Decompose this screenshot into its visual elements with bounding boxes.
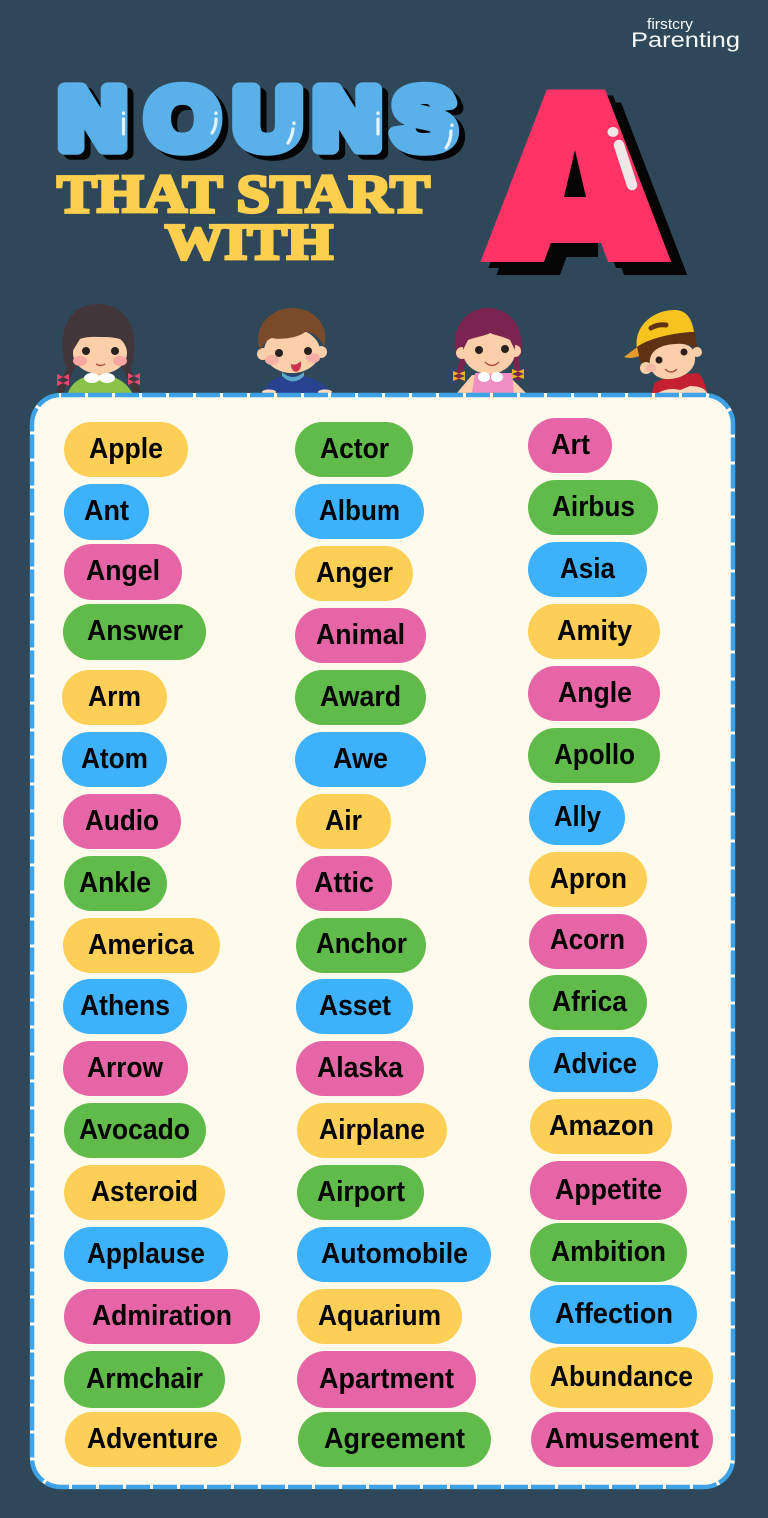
pill: Automobile <box>297 1227 491 1282</box>
character: girl with green dress <box>57 304 140 393</box>
pill: Asia <box>528 542 647 597</box>
pill: Anger: Anger <box>316 557 393 589</box>
pill: Avocado: Avocado <box>79 1114 190 1146</box>
pill: Avocado <box>64 1103 206 1158</box>
pill: Admiration: Admiration <box>92 1300 232 1332</box>
pill: Agreement: Agreement <box>324 1423 465 1455</box>
pill: Athens: Athens <box>80 990 170 1022</box>
pill: Abundance <box>530 1347 713 1408</box>
pill: Angel <box>64 544 182 600</box>
pill: Ambition <box>530 1223 687 1282</box>
pill: Appetite: Appetite <box>555 1174 662 1206</box>
pill: Ankle: Ankle <box>79 867 151 899</box>
column 1: Apple to Adventure <box>62 422 260 1467</box>
pill: Art <box>528 418 612 473</box>
pill: Art: Art <box>551 429 590 461</box>
pill: Arrow <box>63 1041 188 1096</box>
pill: Awe: Awe <box>333 743 388 775</box>
pill: Abundance: Abundance <box>550 1361 693 1393</box>
pill: Advice: Advice <box>553 1048 637 1080</box>
pill: Audio: Audio <box>85 805 159 837</box>
pill: Album <box>295 484 424 539</box>
pill: Apollo: Apollo <box>554 739 635 771</box>
pill: Africa: Africa <box>552 986 628 1018</box>
pill: Ally: Ally <box>554 801 601 833</box>
pill: Angle <box>528 666 660 721</box>
pill: Actor <box>295 422 413 477</box>
logo: FirstCry Parenting <box>631 16 740 52</box>
column 2: Actor to Agreement <box>295 422 491 1467</box>
pill: Airport: Airport <box>317 1176 405 1208</box>
pill: Asia: Asia <box>560 553 616 585</box>
pill: Applause: Applause <box>87 1238 205 1270</box>
pill: Adventure: Adventure <box>87 1423 218 1455</box>
pill: Album: Album <box>319 495 400 527</box>
title: THAT START: THAT START <box>57 164 430 224</box>
title: NOUNS: NOUNS <box>59 71 455 166</box>
pill: Alaska <box>296 1041 424 1096</box>
pill: Atom <box>62 732 167 787</box>
character: boy with blue shirt <box>257 308 332 394</box>
pill: Angle: Angle <box>558 677 632 709</box>
pill: Apple: Apple <box>89 433 163 465</box>
pill: Agreement <box>298 1412 491 1467</box>
big letter A: A <box>504 64 664 299</box>
pill: Apron <box>529 852 647 907</box>
pill: Automobile: Automobile <box>321 1238 468 1270</box>
pill: Angel: Angel <box>86 555 160 587</box>
pill: Anchor: Anchor <box>316 928 407 960</box>
pill: Air: Air <box>325 805 362 837</box>
pill: Alaska: Alaska <box>317 1052 404 1084</box>
pill: Airbus: Airbus <box>552 491 635 523</box>
pill: Ant: Ant <box>84 495 129 527</box>
pill: Aquarium: Aquarium <box>318 1300 441 1332</box>
pill: Adventure <box>65 1412 241 1467</box>
pill: Arm: Arm <box>88 681 141 713</box>
pill: America <box>63 918 220 973</box>
pill: Attic <box>296 856 392 911</box>
pill: Ambition: Ambition <box>551 1236 666 1268</box>
character: boy with yellow cap <box>624 310 707 393</box>
character: girl with pink dress <box>453 308 526 393</box>
big letter A: A <box>496 58 656 293</box>
pill: Arrow: Arrow <box>87 1052 163 1084</box>
pill: Apartment: Apartment <box>319 1363 454 1395</box>
pill: Affection <box>530 1285 697 1344</box>
title: WITH: WITH <box>165 215 333 271</box>
pill: Applause <box>64 1227 228 1282</box>
pill: America: America <box>88 929 195 961</box>
pill: Ankle <box>64 856 167 911</box>
pill: Advice <box>529 1037 658 1092</box>
pill: Anger <box>295 546 413 601</box>
pill: Armchair: Armchair <box>86 1363 203 1395</box>
pill: Airbus <box>528 480 658 535</box>
pill: Asteroid <box>64 1165 225 1220</box>
pill: Atom: Atom <box>81 743 148 775</box>
pill: Amity <box>528 604 660 659</box>
pill: Armchair <box>64 1351 225 1408</box>
pill: Amusement <box>531 1412 713 1467</box>
pill: Attic: Attic <box>314 867 374 899</box>
panel: word list <box>30 393 735 1489</box>
pill: Apron: Apron <box>550 863 627 895</box>
pill: Airport <box>297 1165 424 1220</box>
pill: Amusement: Amusement <box>545 1423 699 1455</box>
pill: Anchor <box>296 918 426 973</box>
pill: Asset: Asset <box>319 990 391 1022</box>
pill: Acorn: Acorn <box>550 924 625 956</box>
pill: Ant <box>64 484 149 540</box>
logo: FirstCry Parenting: firstcry <box>647 16 694 33</box>
pill: Audio <box>63 794 181 849</box>
column 3: Art to Amusement <box>528 418 713 1467</box>
pill: Answer: Answer <box>87 615 183 647</box>
pill: Airplane <box>297 1103 447 1158</box>
pill: Amazon: Amazon <box>549 1110 654 1142</box>
logo: FirstCry Parenting: Parenting <box>631 29 740 52</box>
pill: Actor: Actor <box>320 433 389 465</box>
pill: Award: Award <box>320 681 401 713</box>
pill: Animal <box>295 608 426 663</box>
pill: Acorn <box>529 914 647 969</box>
pill: Airplane: Airplane <box>319 1114 425 1146</box>
pill: Athens <box>63 979 187 1034</box>
big letter A: A <box>512 71 672 306</box>
pill: Appetite <box>530 1161 687 1220</box>
title: NOUNS: NOUNS <box>65 76 461 171</box>
pill: Aquarium <box>297 1289 462 1344</box>
pill: Answer <box>63 604 206 660</box>
pill: Ally <box>529 790 625 845</box>
pill: Amazon <box>530 1099 672 1154</box>
pill: Apartment <box>297 1351 476 1408</box>
pill: Asteroid: Asteroid <box>91 1176 198 1208</box>
pill: Asset <box>296 979 413 1034</box>
pill: Africa <box>529 975 647 1030</box>
pill: Award <box>295 670 426 725</box>
pill: Affection: Affection <box>555 1298 673 1330</box>
pill: Animal: Animal <box>316 619 405 651</box>
pill: Air <box>296 794 391 849</box>
pill: Admiration <box>64 1289 260 1344</box>
pill: Arm <box>62 670 167 725</box>
pill: Apollo <box>528 728 660 783</box>
pill: Awe <box>295 732 426 787</box>
pill: Apple <box>64 422 188 477</box>
pill: Amity: Amity <box>557 615 632 647</box>
